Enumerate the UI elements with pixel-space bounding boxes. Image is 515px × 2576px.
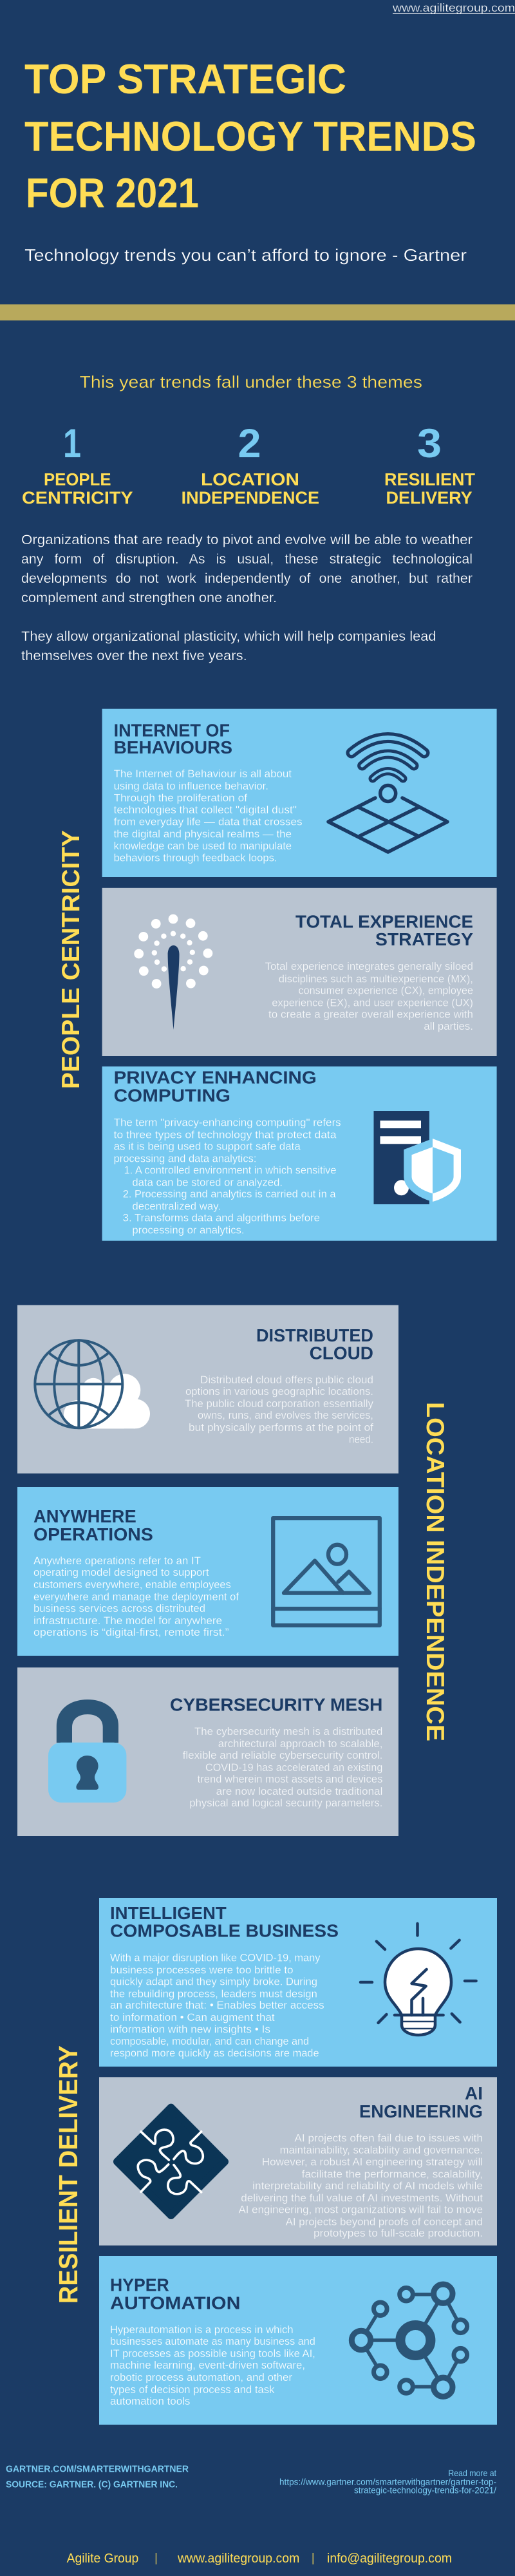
- vertical label: location independence: LOCATION INDEPENDENCE: [421, 1402, 449, 1741]
- heading: HYPER: [110, 2275, 169, 2295]
- body text: decentralized way.: [132, 1201, 221, 1213]
- theme 3: resilient delivery: [384, 421, 476, 507]
- heading: PRIVACY ENHANCING: [114, 1068, 317, 1088]
- body text: COVID-19 has accelerated an existing: [205, 1762, 382, 1774]
- source credit: [6, 2464, 189, 2490]
- body text: need.: [349, 1434, 373, 1445]
- body text: AI projects often fail due to issues with: [294, 2132, 483, 2144]
- gold divider band: [0, 304, 515, 321]
- body text: [265, 961, 473, 1032]
- theme 3: resilient delivery: RESILIENT: [384, 470, 476, 489]
- source credit: GARTNER.COM/SMARTERWITHGARTNER: [6, 2464, 189, 2474]
- heading: [114, 1068, 317, 1106]
- theme 2: location independence: LOCATION: [201, 470, 299, 489]
- body text: information with new insights • Is: [110, 2023, 270, 2035]
- icon: globe and cloud: [35, 1340, 150, 1429]
- body text: businesses automate as many business and: [110, 2336, 315, 2347]
- body text: behaviors through feedback loops.: [114, 852, 277, 864]
- body text: delivering the full value of AI investments. Without: [241, 2192, 483, 2204]
- body text: [183, 1726, 382, 1809]
- body text: from everyday life — data that crosses: [114, 816, 303, 828]
- source credit: SOURCE: GARTNER. (C) GARTNER INC.: [6, 2479, 178, 2490]
- body text: machine learning, event-driven software,: [110, 2360, 305, 2371]
- icon: picture frame with mountains: [273, 1518, 380, 1625]
- body text: The term "privacy-enhancing computing" refers: [114, 1117, 341, 1128]
- body text: maintainability, scalability and governance.: [280, 2145, 483, 2156]
- icon: light bulb: [360, 1924, 476, 2035]
- body text: Anywhere operations refer to an IT: [33, 1555, 201, 1567]
- body text: AI projects beyond proofs of concept and: [286, 2216, 483, 2228]
- heading: ANYWHERE: [33, 1506, 136, 1526]
- theme 3: resilient delivery: DELIVERY: [386, 488, 473, 507]
- body text: facilitate the performance, scalability,: [302, 2168, 483, 2180]
- icon: server with shield: [373, 1111, 461, 1204]
- body text: options in various geographic locations.: [185, 1386, 373, 1397]
- theme 3: resilient delivery: 3: [417, 421, 442, 466]
- read more link: https://www.gartner.com/smarterwithgartner/gartner-top-: [279, 2477, 496, 2486]
- body text: [110, 2324, 315, 2407]
- body text: However, a robust AI engineering strategy will: [262, 2156, 483, 2168]
- icon: dandelion: [134, 914, 212, 1030]
- panel: intelligent composable business: [99, 1898, 497, 2067]
- body text: The Internet of Behaviour is all about: [114, 768, 292, 780]
- body text: With a major disruption like COVID-19, many: [110, 1952, 321, 1964]
- body text: disciplines such as multiexperience (MX),: [279, 973, 473, 985]
- heading: STRATEGY: [375, 929, 473, 949]
- body text: Total experience integrates generally siloed: [265, 961, 473, 972]
- body text: data can be stored or analyzed.: [132, 1177, 283, 1189]
- heading: OPERATIONS: [33, 1524, 153, 1544]
- heading: CYBERSECURITY MESH: [170, 1695, 382, 1715]
- body text: using data to influence behavior.: [114, 781, 268, 792]
- body text: consumer experience (CX), employee: [299, 985, 473, 997]
- body text: The public cloud corporation essentially: [185, 1398, 374, 1410]
- intro paragraph: themselves over the next five years.: [21, 649, 247, 663]
- heading: [33, 1506, 153, 1544]
- heading: BEHAVIOURS: [114, 737, 232, 757]
- body text: everywhere and manage the deployment of: [33, 1591, 239, 1603]
- body text: Through the proliferation of: [114, 792, 247, 804]
- theme 1: people centricity: [22, 421, 133, 507]
- body text: operating model designed to support: [33, 1567, 209, 1578]
- heading: TOTAL EXPERIENCE: [295, 912, 473, 932]
- body text: The cybersecurity mesh is a distributed: [194, 1726, 382, 1738]
- intro paragraph: complement and strengthen one another.: [21, 591, 277, 605]
- body text: flexible and reliable cybersecurity control.: [183, 1750, 382, 1761]
- body text: physical and logical security parameters.: [189, 1797, 382, 1809]
- heading: [295, 912, 473, 949]
- website link top right: www.agilitegroup.com: [392, 1, 515, 14]
- themes intro heading: This year trends fall under these 3 themes: [80, 372, 422, 392]
- body text: infrastructure. The model for anywhere: [33, 1615, 222, 1627]
- body text: are now located outside traditional: [216, 1786, 382, 1797]
- icon: network nodes: [351, 2284, 467, 2396]
- body text: all parties.: [424, 1021, 473, 1032]
- body text: the rebuilding process, leaders must design: [110, 1988, 317, 2000]
- panel: anywhere operations: [17, 1487, 398, 1656]
- theme 1: people centricity: CENTRICITY: [22, 488, 133, 507]
- body text: experience (EX), and user experience (UX): [272, 997, 473, 1009]
- body text: [110, 1952, 324, 2059]
- heading: [114, 721, 232, 757]
- icon: padlock: [48, 1700, 126, 1803]
- body text: to create a greater overall experience with: [268, 1009, 473, 1020]
- footer contact line: [67, 2551, 452, 2566]
- body text: business processes were too brittle to: [110, 1964, 294, 1976]
- body text: 2. Processing and analytics is carried out in a: [123, 1189, 336, 1200]
- panel: hyper automation: [99, 2256, 497, 2425]
- body text: knowledge can be used to manipulate: [114, 840, 292, 852]
- body text: the digital and physical realms — the: [114, 828, 292, 840]
- intro paragraph: Organizations that are ready to pivot and evolve will be able to weather: [21, 533, 473, 547]
- body text: Distributed cloud offers public cloud: [200, 1374, 373, 1386]
- theme 2: location independence: INDEPENDENCE: [182, 488, 319, 507]
- vertical label: resilient delivery: RESILIENT DELIVERY: [53, 2045, 83, 2304]
- body text: Hyperautomation is a process in which: [110, 2324, 294, 2336]
- panel: privacy enhancing computing: [102, 1066, 497, 1241]
- title: TECHNOLOGY TRENDS: [24, 113, 476, 160]
- body text: 1. A controlled environment in which sensitive: [124, 1165, 336, 1177]
- title: FOR 2021: [26, 169, 199, 216]
- theme 1: people centricity: PEOPLE: [44, 470, 111, 489]
- panel: distributed cloud: [17, 1305, 398, 1473]
- intro paragraph: any form of disruption. As is usual, these strategic technological: [21, 552, 473, 567]
- body text: architectural approach to scalable,: [218, 1738, 382, 1750]
- footer contact line: Agilite Group: [67, 2551, 138, 2566]
- subtitle: Technology trends you can’t afford to ignore - Gartner: [24, 245, 467, 265]
- body text: processing and data analytics:: [114, 1153, 256, 1165]
- read more link: [279, 2468, 496, 2496]
- heading: COMPOSABLE BUSINESS: [110, 1921, 339, 1941]
- body text: as it is being used to support safe data: [114, 1141, 301, 1153]
- body text: interpretability and reliability of AI models while: [252, 2181, 483, 2192]
- body text: an architecture that: • Enables better access: [110, 2000, 324, 2011]
- body text: respond more quickly as decisions are made: [110, 2047, 319, 2059]
- heading: [110, 2275, 241, 2313]
- body text: [33, 1555, 239, 1638]
- body text: customers everywhere, enable employees: [33, 1579, 231, 1591]
- intro paragraph: developments do not work independently of one another, but rather: [21, 571, 473, 586]
- body text: robotic process automation, and other: [110, 2372, 293, 2383]
- icon: puzzle diamond: [117, 2108, 225, 2215]
- body text: composable, modular, and can change and: [110, 2036, 309, 2047]
- intro paragraph: They allow organizational plasticity, which will help companies lead: [21, 629, 436, 644]
- body text: types of decision process and task: [110, 2384, 275, 2396]
- body text: processing or analytics.: [132, 1224, 245, 1236]
- heading: AUTOMATION: [110, 2293, 241, 2313]
- heading: INTELLIGENT: [110, 1903, 227, 1923]
- heading: AI: [465, 2083, 483, 2103]
- panel: internet of behaviours: [102, 709, 497, 877]
- heading: INTERNET OF: [114, 721, 230, 741]
- body text: [238, 2132, 483, 2239]
- panel: total experience strategy: [102, 888, 497, 1056]
- theme 2: location independence: [182, 421, 319, 507]
- body text: owns, runs, and evolves the services,: [198, 1410, 373, 1421]
- title: [24, 55, 476, 216]
- body text: 3. Transforms data and algorithms before: [123, 1212, 320, 1224]
- body text: IT processes as possible using tools like AI,: [110, 2348, 315, 2360]
- title: TOP STRATEGIC: [24, 55, 346, 102]
- body text: trend wherein most assets and devices: [198, 1774, 382, 1785]
- body text: to information • Can augment that: [110, 2012, 275, 2023]
- vertical label: people centricity: PEOPLE CENTRICITY: [57, 830, 85, 1089]
- heading: DISTRIBUTED: [256, 1325, 373, 1345]
- footer contact line: info@agilitegroup.com: [327, 2551, 452, 2566]
- body text: but physically performs at the point of: [189, 1422, 373, 1434]
- body text: operations is “digital-first, remote first.”: [33, 1627, 229, 1638]
- heading: [256, 1325, 373, 1363]
- body text: quickly adapt and they simply broke. During: [110, 1976, 317, 1987]
- body text: automation tools: [110, 2396, 190, 2407]
- heading: COMPUTING: [114, 1086, 230, 1106]
- heading: ENGINEERING: [359, 2101, 483, 2121]
- body text: [185, 1374, 374, 1445]
- body text: to three types of technology that protect data: [114, 1130, 337, 1141]
- theme 1: people centricity: 1: [63, 421, 81, 466]
- footer contact line: www.agilitegroup.com: [177, 2551, 299, 2566]
- body text: [114, 1117, 341, 1236]
- heading: CLOUD: [310, 1343, 373, 1363]
- heading: [359, 2083, 483, 2121]
- icon: wifi location grid: [328, 738, 447, 852]
- body text: business services across distributed: [33, 1603, 205, 1615]
- body text: technologies that collect "digital dust": [114, 804, 297, 816]
- read more link: strategic-technology-trends-for-2021/: [354, 2486, 496, 2496]
- body text: AI engineering, most organizations will fail to move: [238, 2204, 483, 2216]
- panel: ai engineering: [99, 2077, 497, 2246]
- intro paragraph: [21, 533, 473, 663]
- theme 2: location independence: 2: [238, 421, 261, 466]
- panel: cybersecurity mesh: [17, 1667, 398, 1836]
- body text: prototypes to full-scale production.: [314, 2228, 483, 2239]
- read more link: Read more at: [448, 2468, 496, 2478]
- body text: [114, 768, 303, 864]
- heading: [110, 1903, 339, 1941]
